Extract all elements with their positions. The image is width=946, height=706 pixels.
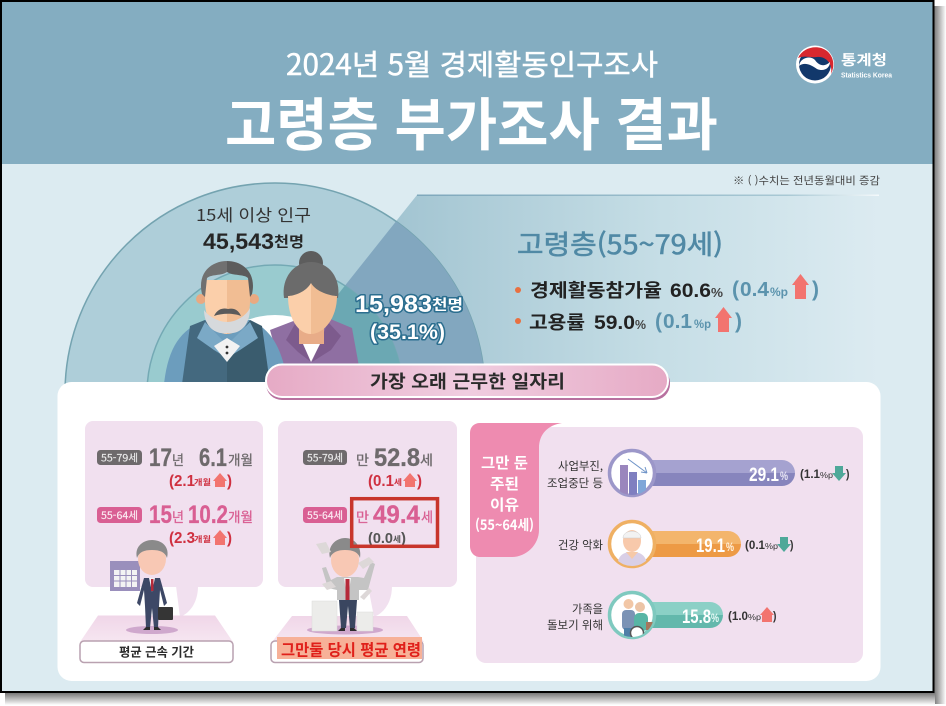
row: worsening health 19.1% [558,522,794,570]
row: business slump 29.1%: % [780,469,788,483]
value 17 years 6.1 months: 17 [149,444,172,472]
stat: participation rate: % [711,285,723,300]
label: average age when leaving: 그만둘 당시 평균 연령 [281,636,421,660]
heading: older group 55-79: 고령층(55~79세) [517,223,723,262]
badge 55-64: 55-64세 [101,507,138,522]
change +2.1 months: 개월 [194,477,211,488]
banner: longest-held job: 가장 오래 근무한 일자리 [370,368,565,394]
platform [80,616,233,642]
stat: employment rate [515,307,742,335]
value age 52.8: 세 [420,449,433,469]
row: family care 15.8% [547,592,777,640]
illustration: businessman [136,540,173,630]
change +1.0%p: ) [773,611,777,623]
logo wordmark: 통계청 [841,50,887,70]
change +1.0%p [728,607,777,623]
illustration: older man [164,261,288,384]
label: 15,983 thousand older people: 15,983 [355,291,432,318]
main title: 고령층 부가조사 결과 [225,80,718,162]
label: population aged 15 and over: 15세 이상 인구 [196,202,311,226]
change 0.0 years: 세 [393,534,401,545]
platform [272,616,424,642]
label: population aged 15 and over [196,202,311,254]
badge 55-79: 55-79세 [101,450,138,464]
change +2.3 months: (2.3 [169,530,195,547]
icon: up arrow [715,307,732,332]
change 0.0 years [368,530,406,547]
platform shadow [126,626,178,634]
badge 55-64: 55-64세 [307,507,343,522]
speech tail [176,586,198,617]
paper stacks [312,601,373,631]
row: worsening health 19.1%: 건강 악화 [558,537,603,553]
change +2.3 months [169,530,232,547]
row: business slump 29.1%: 29.1 [749,465,779,486]
subtitle: 2024년 5월 경제활동인구조사 [286,42,658,84]
change +2.1 months [169,473,232,490]
change -0.1%p: ) [790,540,794,552]
stat: participation rate: 0.4 [740,279,770,301]
label: average tenure: 평균 근속 기간 [119,642,194,660]
stat: employment rate: ( [655,310,662,333]
stat: participation rate: ) [812,278,819,301]
header band [2,2,933,164]
red highlight box [352,499,438,546]
change -1.1%p: ) [846,469,850,481]
value 15 years 10.2 months: 개월 [228,506,253,526]
change -0.1%p: %p [765,541,778,551]
icon: calendar [110,561,140,591]
change -1.1%p: %p [820,470,833,480]
value 15 years 10.2 months: 년 [172,506,184,526]
value 15 years 10.2 months: 10.2 [188,501,228,529]
stat: employment rate: ) [735,310,742,333]
platform shadow [307,626,383,634]
note: change versus same month of previous year: ※ ( )수치는 전년동월대비 증감 [733,173,880,188]
icon: up arrow [792,274,809,299]
bar [632,460,795,473]
value 17 years 6.1 months: 년 [172,449,184,469]
value 17 years 6.1 months [149,444,253,472]
stat: participation rate: 경제활동참가율 [530,277,662,303]
panel: average age at leaving [271,421,457,662]
value age 49.4: 세 [421,506,433,526]
value age 49.4: 49.4 [373,501,420,529]
label: average tenure [80,641,233,662]
stat: employment rate: 고용률 [529,309,585,335]
logo english name: Statistics Korea [841,72,892,80]
stat: employment rate: %p [694,317,711,331]
value age 52.8 [356,444,433,472]
stat: participation rate: ( [732,278,739,301]
change +0.1 years: 세 [394,477,402,488]
row: business slump 29.1% [547,450,850,496]
change +0.1 years: (0.1 [368,473,394,490]
tab: main reasons ages 55-64: (55~64세) [475,515,534,535]
value 15 years 10.2 months [149,501,253,529]
stat: participation rate: %p [770,285,788,299]
stat: employment rate: 0.1 [663,311,692,333]
value 17 years 6.1 months: 개월 [228,449,253,469]
change +2.3 months: 개월 [194,534,211,545]
icon: family caregiver [610,592,654,640]
illustration: older woman [270,251,360,384]
value age 52.8: 만 [356,449,369,469]
stat: participation rate [515,274,819,303]
row: family care 15.8%: 돌보기 위해 [547,617,603,633]
change -1.1%p: (1.1 [800,469,821,481]
change +2.1 months: (2.1 [169,473,195,490]
label: population aged 15 and over: 45,543 [203,229,274,254]
row: business slump 29.1%: 조업중단 등 [547,475,603,491]
change -0.1%p [745,537,794,552]
row: family care 15.8%: % [711,611,719,625]
population semicircles [64,182,484,384]
panel: main reasons for leaving [470,423,863,663]
icon: patient [610,522,654,570]
wedge top line [417,194,879,196]
panel: average tenure [80,421,263,662]
change +2.1 months: ) [227,473,232,490]
label: population aged 15 and over: 천명 [274,231,304,252]
main white panel [58,382,880,681]
tab: main reasons ages 55-64: 그만 둔 [481,452,528,473]
row: worsening health 19.1%: 19.1 [696,536,725,557]
value age 49.4 [356,501,433,529]
value 17 years 6.1 months: 6.1 [199,444,227,472]
stat: employment rate: % [635,317,646,332]
change +0.1 years [368,473,422,490]
label: 15,983 thousand older people: 천명 [432,294,463,315]
change 0.0 years: (0.0 [368,530,393,547]
stat: participation rate: 60.6 [670,281,711,302]
tab: main reasons ages 55-64 [470,423,562,557]
label: 15,983 thousand older people: (35.1%) [370,321,445,344]
tab: main reasons ages 55-64: 이유 [490,494,519,515]
row: family care 15.8%: 15.8 [682,607,711,628]
bar [632,602,723,615]
change +1.0%p: %p [748,612,761,622]
change +1.0%p: (1.0 [728,611,748,623]
change -0.1%p: (0.1 [745,540,766,552]
banner: longest-held job [266,364,670,400]
row: family care 15.8%: 가족을 [572,601,603,617]
row: worsening health 19.1%: % [726,540,734,554]
stat: employment rate: 59.0 [594,313,635,334]
logo: Statistics Korea [796,46,892,84]
change +0.1 years: ) [417,473,422,490]
change 0.0 years: ) [401,530,406,547]
speech tail [368,586,392,617]
tab: main reasons ages 55-64: 주된 [490,473,519,494]
row: business slump 29.1%: 사업부진, [558,458,603,474]
value age 49.4: 만 [356,506,369,526]
value age 52.8: 52.8 [374,444,420,472]
label: 15,983 thousand older people [355,291,463,344]
badge 55-79: 55-79세 [307,450,343,464]
change -1.1%p [800,466,850,481]
icon: falling chart [610,450,654,496]
value 15 years 10.2 months: 15 [149,501,172,529]
wedge background for older group [268,195,880,382]
change +2.3 months: ) [227,530,232,547]
illustration: man throwing papers [316,538,375,631]
bar [632,531,741,544]
